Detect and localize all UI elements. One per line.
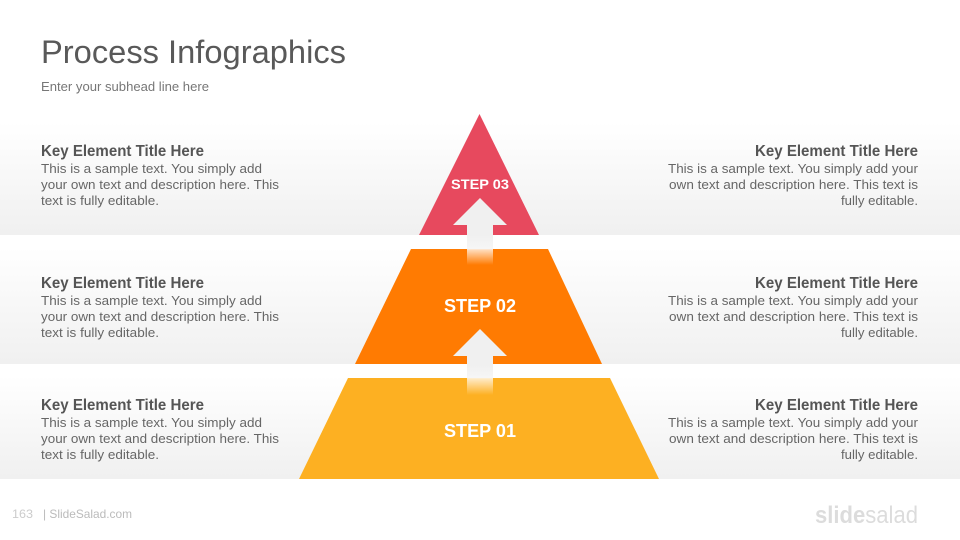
pyramid level: step 02: STEP 02 (444, 296, 516, 316)
text block: left row 1: text is fully editable. (41, 193, 159, 208)
text block: left row 1: Key Element Title Here (41, 143, 204, 160)
text block: left row 1: your own text and description here. This (41, 177, 280, 192)
subhead: Enter your subhead line here (41, 79, 209, 94)
text block: left row 3 (41, 397, 280, 462)
text block: right row 3 (668, 397, 919, 462)
text block: right row 1: fully editable. (841, 193, 918, 208)
pyramid level: step 01 (299, 378, 659, 479)
text block: left row 1 (41, 143, 280, 208)
text block: left row 2: text is fully editable. (41, 325, 159, 340)
text block: right row 1: own text and description here. This text is (669, 177, 919, 192)
pyramid (299, 114, 659, 479)
arrow: step 01 to step 02 (453, 329, 507, 395)
text block: right row 3: Key Element Title Here (755, 397, 918, 414)
text block: right row 1 (668, 143, 919, 208)
pyramid level: step 01: STEP 01 (444, 421, 516, 441)
text block: right row 3: fully editable. (841, 447, 918, 462)
pyramid level: step 03 (419, 114, 539, 235)
text block: right row 2: own text and description here. This text is (669, 309, 919, 324)
text block: left row 2 (41, 275, 280, 340)
pyramid level: step 02 (355, 249, 602, 364)
footer: site name: | SlideSalad.com (43, 507, 132, 521)
title: Process Infographics (41, 34, 346, 70)
arrow: step 02 to step 03 (453, 198, 507, 265)
footer: logo: slidesalad (815, 502, 918, 529)
text block: right row 2 (668, 275, 919, 340)
text block: right row 2: fully editable. (841, 325, 918, 340)
text block: right row 2: This is a sample text. You simply add your (668, 293, 919, 308)
text block: left row 2: Key Element Title Here (41, 275, 204, 292)
text block: left row 3: your own text and description here. This (41, 431, 280, 446)
text block: left row 3: Key Element Title Here (41, 397, 204, 414)
text block: left row 2: This is a sample text. You simply add (41, 293, 262, 308)
text block: right row 3: This is a sample text. You simply add your (668, 415, 919, 430)
text block: right row 1: Key Element Title Here (755, 143, 918, 160)
pyramid level: step 03: STEP 03 (451, 176, 509, 192)
text block: left row 2: your own text and description here. This (41, 309, 280, 324)
text block: right row 1: This is a sample text. You simply add your (668, 161, 919, 176)
text block: left row 3: This is a sample text. You simply add (41, 415, 262, 430)
text block: right row 3: own text and description here. This text is (669, 431, 919, 446)
background bands (0, 110, 960, 479)
footer: page number: 163 (12, 507, 33, 521)
text block: right row 2: Key Element Title Here (755, 275, 918, 292)
text block: left row 1: This is a sample text. You simply add (41, 161, 262, 176)
text block: left row 3: text is fully editable. (41, 447, 159, 462)
